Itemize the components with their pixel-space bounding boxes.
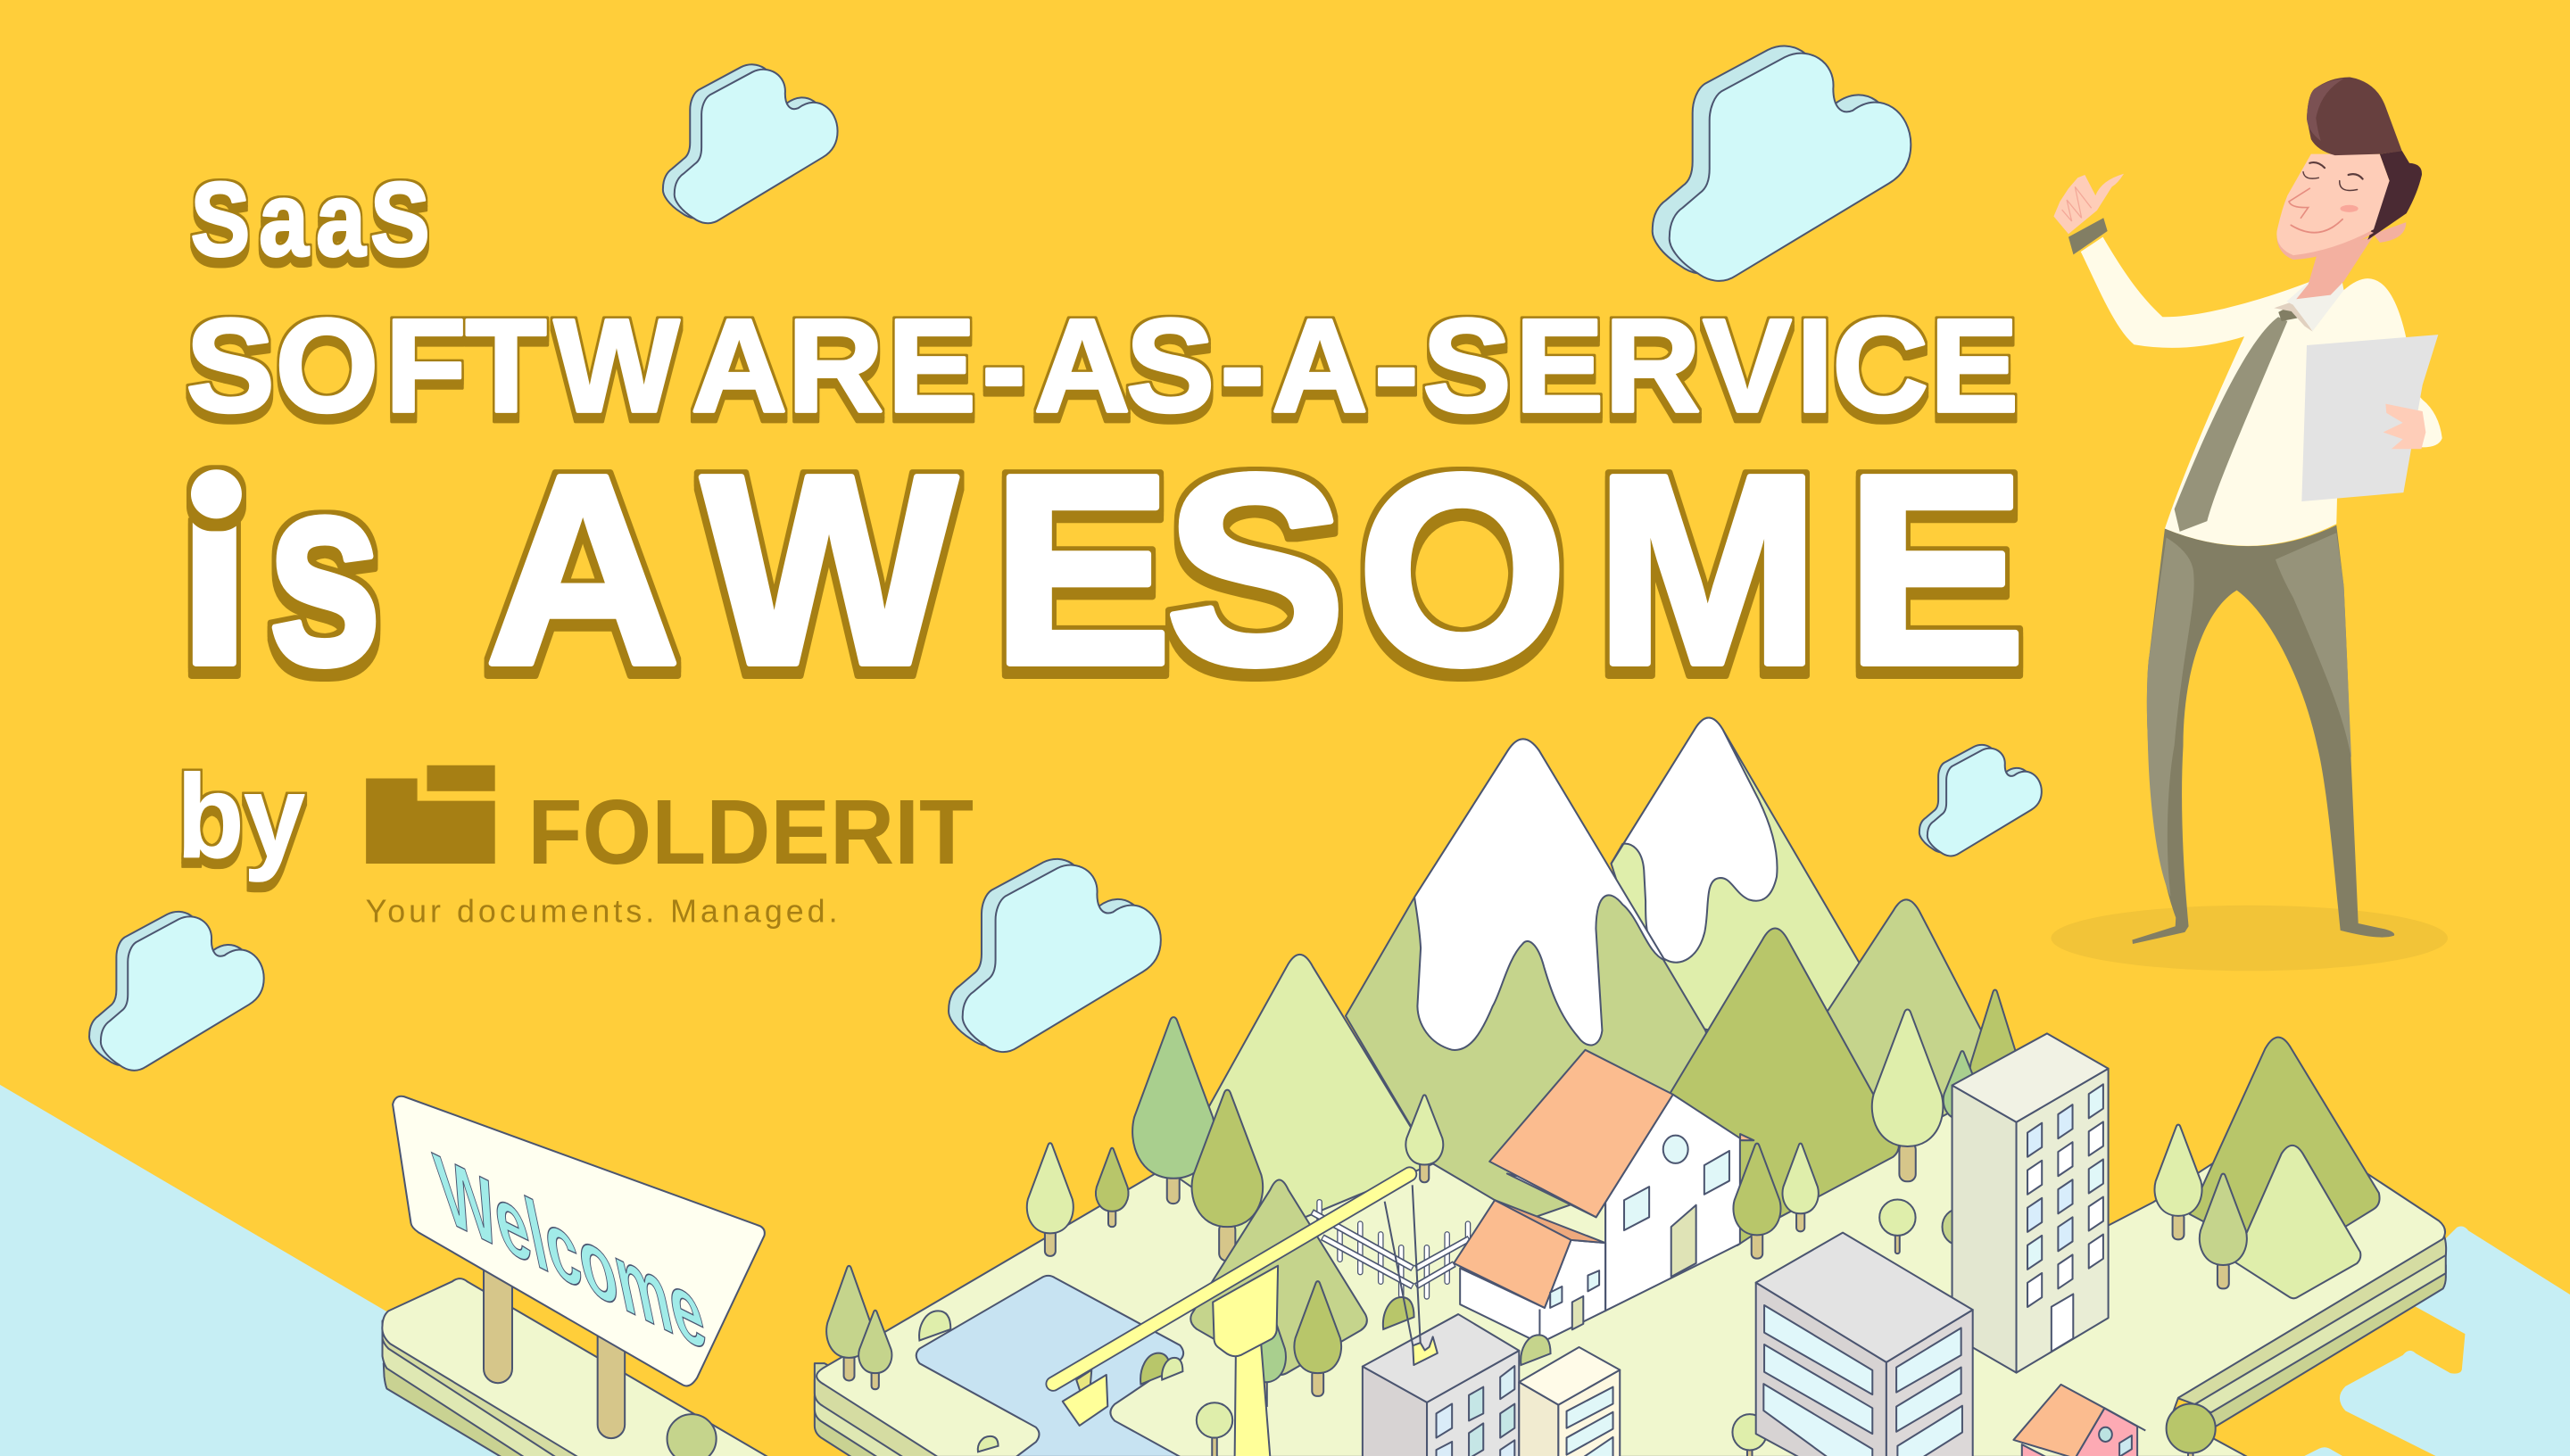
grey building near crane bbox=[1363, 1314, 1519, 1456]
windows bbox=[1567, 1387, 1613, 1456]
trees right of house bbox=[1383, 1009, 2247, 1456]
left trees bbox=[826, 1017, 1443, 1456]
right strata middle bbox=[2194, 1249, 2446, 1412]
window left bbox=[1624, 1187, 1649, 1230]
left strata lower bbox=[815, 1396, 1016, 1456]
right tree olive bbox=[2200, 1174, 2247, 1288]
cloud small right bbox=[1919, 745, 2042, 856]
back right mountain snow bbox=[1612, 717, 1778, 963]
small olive tree bbox=[1096, 1148, 1128, 1227]
trouser highlight right bbox=[2276, 533, 2351, 757]
collar shade bbox=[2274, 302, 2313, 332]
title: is: s bbox=[267, 419, 382, 721]
wing door bbox=[1572, 1296, 1583, 1329]
ear bbox=[2374, 222, 2406, 243]
corner tree large bbox=[826, 1266, 872, 1380]
crane counterweight link bbox=[1076, 1370, 1091, 1396]
green tree behind crane tower bbox=[1245, 1295, 1286, 1406]
wall divider bbox=[1539, 1198, 1605, 1344]
cuff bbox=[2068, 218, 2108, 254]
windows bbox=[1763, 1305, 1962, 1456]
small bush bottom bbox=[978, 1436, 999, 1452]
corner tree small bbox=[858, 1311, 891, 1389]
right olive mountain bbox=[2190, 1038, 2380, 1270]
main roof bbox=[1489, 1050, 1673, 1217]
cloud left bbox=[89, 912, 264, 1071]
building windows bbox=[2027, 1084, 2103, 1307]
businessman illustration bbox=[2051, 78, 2448, 971]
small bush by pond bbox=[1162, 1358, 1182, 1380]
eave bbox=[2104, 1408, 2145, 1430]
building right face bbox=[2017, 1069, 2109, 1373]
windows bbox=[1437, 1366, 1514, 1456]
right face bbox=[1886, 1310, 1973, 1456]
back green tree bbox=[1132, 1017, 1215, 1204]
left blue water area bbox=[0, 1085, 634, 1456]
wing roof bbox=[1454, 1200, 1571, 1308]
welcome sign board bbox=[393, 1096, 765, 1386]
cloud top right bbox=[1653, 46, 1911, 281]
right strata upper bbox=[2176, 1232, 2446, 1404]
platform top bbox=[382, 1278, 770, 1456]
window right bbox=[1704, 1151, 1729, 1195]
round tree bbox=[1879, 1199, 1916, 1253]
collar bbox=[2286, 281, 2344, 331]
building door bbox=[2052, 1294, 2073, 1352]
logo: folder icon bbox=[366, 765, 495, 864]
house walls bbox=[1507, 1095, 1740, 1311]
fence post fills bbox=[1320, 1202, 1468, 1296]
triangular tree behind crane bbox=[1190, 1179, 1367, 1375]
fence rail outlines bbox=[1312, 1212, 1470, 1286]
cover behind round i-dot bbox=[174, 452, 253, 517]
round tree by grey building bbox=[1732, 1414, 1767, 1456]
right face bbox=[1427, 1351, 1519, 1456]
cream building bbox=[1519, 1347, 1620, 1456]
right blue water area bbox=[2303, 1226, 2570, 1456]
house wing walls bbox=[1460, 1240, 1605, 1344]
hair highlight bbox=[2307, 79, 2344, 141]
roof bbox=[1363, 1314, 1519, 1402]
left face bbox=[1363, 1367, 1427, 1456]
crane hook bbox=[1413, 1336, 1438, 1365]
sign round bush bbox=[667, 1414, 717, 1456]
tie bbox=[2175, 317, 2287, 532]
mountains bbox=[1172, 717, 2380, 1298]
logo tagline: Your documents. Managed. bbox=[366, 893, 838, 929]
shirt bbox=[2081, 237, 2409, 546]
right face bbox=[1558, 1370, 1620, 1456]
sign platform bbox=[382, 1278, 770, 1456]
neck bbox=[2296, 236, 2374, 299]
roof bbox=[2013, 1385, 2104, 1456]
title: is: i bbox=[177, 419, 253, 721]
title: SaaS: SaaS bbox=[191, 161, 430, 278]
round green tree at strata end bbox=[2167, 1404, 2216, 1456]
hand on paper bbox=[2383, 404, 2425, 449]
roof bbox=[1756, 1233, 1973, 1362]
island top surface bbox=[817, 1049, 2445, 1456]
large mountain snow bbox=[1414, 739, 1665, 1050]
sign left post bbox=[484, 1245, 512, 1383]
wing window 2 bbox=[1588, 1270, 1599, 1291]
welcome sign text: Welcome bbox=[427, 1132, 715, 1374]
tree near pond bbox=[1027, 1143, 1074, 1256]
roof bbox=[1519, 1347, 1620, 1405]
crane tower bbox=[1235, 1344, 1270, 1456]
olive tree bbox=[1733, 1144, 1781, 1259]
left strata middle bbox=[815, 1380, 1016, 1456]
crane bbox=[1053, 1174, 1438, 1456]
ground shadow bbox=[2051, 906, 2448, 971]
title: is bbox=[177, 419, 382, 721]
round window bbox=[1663, 1136, 1688, 1163]
right tree light bbox=[2154, 1125, 2202, 1239]
back arm sleeve bbox=[2393, 385, 2442, 447]
building left face bbox=[1952, 1085, 2017, 1373]
right strata lower bbox=[2196, 1265, 2446, 1427]
big grey building bbox=[1756, 1233, 1973, 1456]
round dot of the letter i bbox=[191, 469, 242, 518]
fence post outlines bbox=[1320, 1202, 1468, 1296]
round window bbox=[2099, 1427, 2112, 1442]
dark olive mountain bbox=[1614, 929, 1899, 1245]
facial features bbox=[2289, 162, 2363, 233]
crane cab bbox=[1213, 1266, 1278, 1356]
paper bbox=[2301, 335, 2438, 501]
crane bucket bbox=[1063, 1375, 1107, 1426]
bush by pond bbox=[1140, 1353, 1170, 1384]
face bbox=[2276, 154, 2390, 255]
hair bbox=[2307, 78, 2402, 155]
title: Software-as-a-Service: SOFTWARE-AS-A-SERVICE bbox=[186, 291, 2019, 440]
back right mountain bbox=[1612, 717, 1863, 1049]
trees behind buildings bbox=[1943, 990, 2020, 1245]
platform middle layer bbox=[383, 1338, 590, 1456]
building roof bbox=[1952, 1033, 2109, 1122]
wing roof side bbox=[1495, 1200, 1605, 1243]
left face bbox=[1519, 1382, 1558, 1456]
chin shade bbox=[2276, 196, 2374, 260]
pond bbox=[916, 1276, 1183, 1456]
trouser highlight left bbox=[2147, 537, 2194, 897]
raised hand bbox=[2053, 174, 2124, 234]
tall light tree bbox=[1872, 1009, 1943, 1181]
trousers bbox=[2132, 525, 2394, 944]
pink house bbox=[2013, 1385, 2145, 1456]
house bbox=[1454, 1050, 1753, 1344]
hair back bbox=[2367, 151, 2422, 240]
bush back left bbox=[919, 1311, 950, 1340]
large olive tree bbox=[1192, 1090, 1263, 1261]
pink wall bbox=[2075, 1408, 2137, 1456]
bush by house bbox=[1521, 1335, 1551, 1365]
tie knot bbox=[2278, 305, 2298, 321]
platform upper layer bbox=[383, 1320, 607, 1456]
light tree bbox=[1782, 1144, 1819, 1231]
front wall bbox=[2022, 1444, 2049, 1456]
large mountain bbox=[1346, 739, 1737, 1220]
bush by fence bbox=[1383, 1297, 1414, 1329]
tall building bbox=[1952, 1033, 2109, 1373]
tree above crane bbox=[1405, 1095, 1443, 1182]
cloud top centre bbox=[663, 64, 838, 223]
crane cables bbox=[1385, 1185, 1421, 1345]
middle right mountain bbox=[1803, 899, 2008, 1147]
main door bbox=[1671, 1205, 1696, 1277]
cheek bbox=[2340, 205, 2359, 212]
green tree bbox=[1944, 1051, 1981, 1120]
olive tree by crane bbox=[1294, 1281, 1341, 1396]
round tree bbox=[1943, 1209, 1975, 1245]
light green mountain bbox=[1172, 955, 1433, 1245]
by label: by bbox=[177, 751, 305, 883]
logo: Folderit wordmark: FOLDERIT bbox=[527, 781, 974, 883]
cloud centre bbox=[949, 859, 1161, 1052]
sign right post bbox=[598, 1311, 625, 1438]
platform lower layer bbox=[384, 1363, 590, 1456]
fence rail fills bbox=[1313, 1212, 1469, 1286]
fence bbox=[1312, 1202, 1470, 1296]
window bbox=[2119, 1435, 2132, 1456]
main island platform bbox=[815, 1049, 2446, 1456]
wing window 1 bbox=[1550, 1286, 1562, 1308]
small eave accent bbox=[1740, 1134, 1753, 1140]
crane jib bbox=[1053, 1174, 1410, 1384]
left face bbox=[1756, 1283, 1886, 1456]
round tree bottom centre bbox=[1197, 1402, 1232, 1456]
left strata upper bbox=[815, 1363, 1016, 1456]
tall tree bbox=[1969, 990, 2020, 1108]
right light mountain bbox=[2234, 1146, 2360, 1298]
title: AWESOME: AWESOME bbox=[485, 419, 2026, 721]
